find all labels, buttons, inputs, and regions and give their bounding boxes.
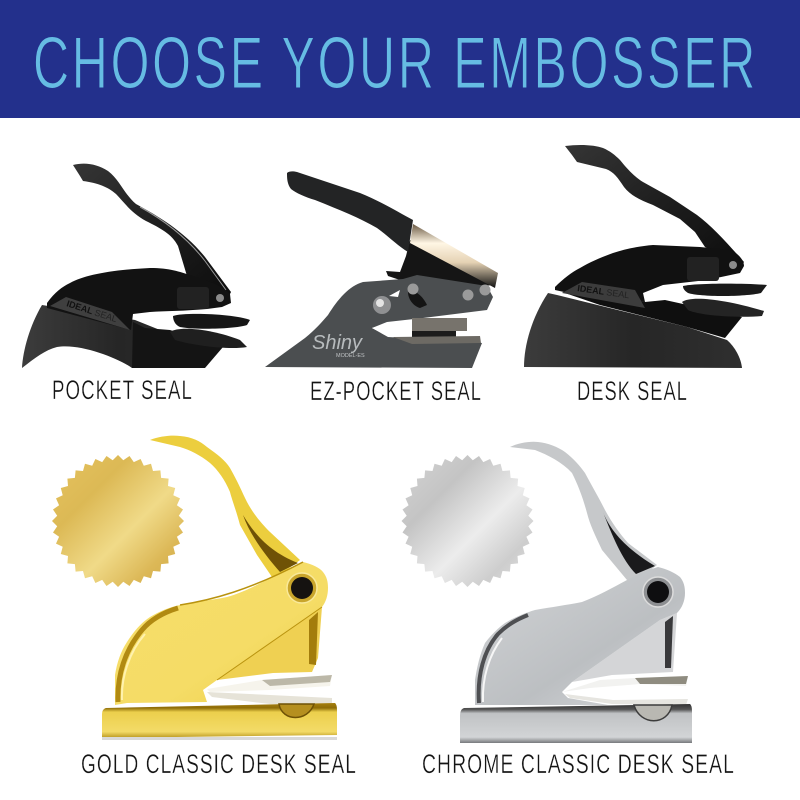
grip: [287, 171, 413, 252]
base: [102, 703, 337, 738]
jaw plates: [393, 318, 481, 344]
middle strip: [562, 292, 742, 338]
ez-pocket seal embosser: [265, 171, 498, 368]
handle: [150, 436, 300, 577]
grey label plate with brand: IDEAL SEAL: [65, 298, 118, 324]
silver foil seal: [402, 455, 534, 587]
handle: [73, 164, 231, 302]
top die: [683, 284, 767, 296]
lower wedge: [217, 607, 322, 680]
handle: [510, 442, 657, 580]
chrome classic embosser: [460, 442, 692, 743]
rivets: [373, 284, 490, 314]
desk seal embosser: [524, 145, 767, 368]
dial: [177, 287, 209, 309]
model text: MODEL-ES: [336, 353, 365, 359]
lower wedge: [572, 613, 677, 682]
handle shadow: [603, 512, 655, 574]
upper arm: [555, 245, 744, 302]
label plate with brand: IDEAL SEAL: [577, 283, 630, 300]
handle: [565, 145, 744, 272]
jaw plates: [562, 676, 688, 705]
label: ez-pocket seal: EZ-POCKET SEAL: [310, 376, 482, 406]
bottom die: [682, 299, 764, 317]
jaw plates: [207, 675, 332, 705]
brand mark: Shiny: [312, 332, 363, 354]
upper arm: [47, 268, 231, 330]
handle shadow: [243, 515, 298, 572]
desk base: [524, 293, 742, 368]
pocket seal embosser: [22, 164, 250, 368]
bottom die: [170, 329, 247, 348]
pivot hole: [287, 573, 317, 603]
pivot hole: [643, 577, 673, 607]
cutouts: [372, 290, 412, 337]
middle strip: [132, 322, 223, 368]
dial: [687, 257, 719, 281]
wheel: [279, 704, 314, 718]
body: [475, 567, 685, 705]
wheel: [634, 705, 672, 721]
black understructure: [386, 240, 495, 286]
gold foil seal: [52, 455, 184, 587]
label: desk seal: DESK SEAL: [577, 376, 688, 406]
grey label plate with brand: [50, 297, 130, 330]
label: gold classic desk seal: GOLD CLASSIC DESK SEAL: [81, 749, 357, 779]
label: pocket seal: POCKET SEAL: [52, 375, 193, 405]
base: [460, 704, 692, 743]
label plate with brand: [562, 282, 645, 308]
top die: [173, 314, 250, 329]
chrome tube: [410, 224, 498, 288]
grey body: [265, 275, 493, 368]
body: [115, 562, 328, 705]
lower base: [22, 305, 215, 368]
title banner: [0, 0, 800, 118]
gold classic embosser: [102, 436, 337, 740]
